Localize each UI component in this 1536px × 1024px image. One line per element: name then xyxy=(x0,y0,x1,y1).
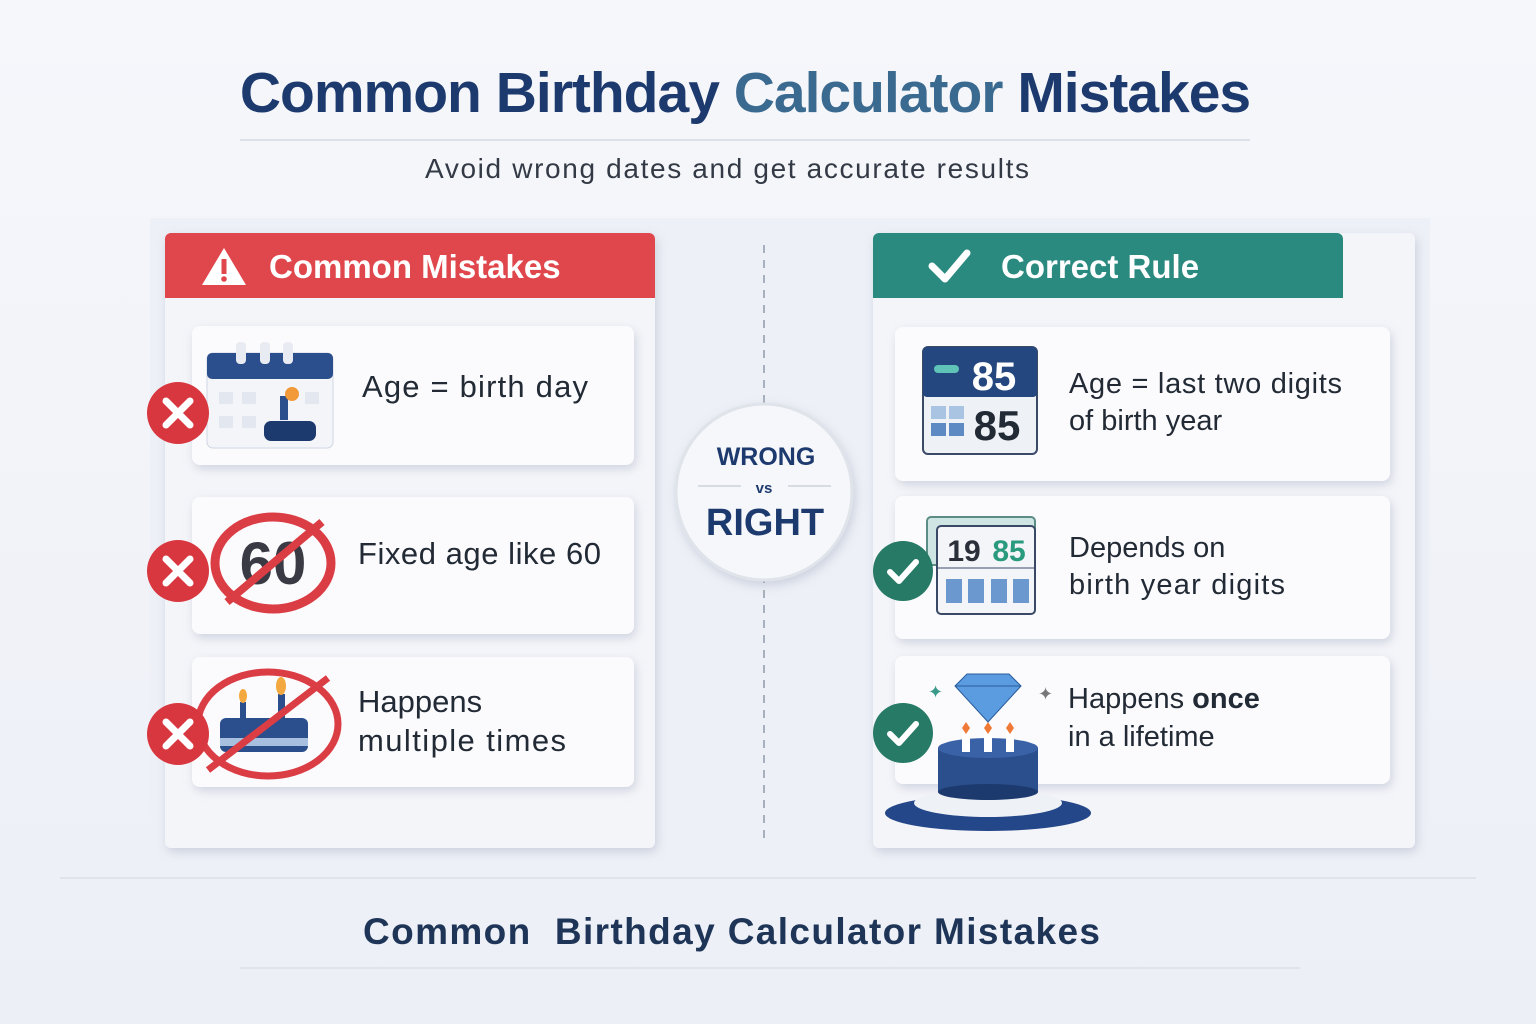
badge: wrong vs right: vs xyxy=(756,480,772,497)
icon: diamond cake: ✦ xyxy=(1038,684,1053,704)
title: Common Birthday Calculator Mistakes xyxy=(240,61,1250,125)
header: correct rule xyxy=(873,233,1343,298)
subtitle: Avoid wrong dates and get accurate results xyxy=(425,153,1029,184)
card: once in a lifetime: in a lifetime xyxy=(1068,721,1215,753)
icon: 1985 calendar: 85 xyxy=(992,535,1026,568)
header: common mistakes: Common Mistakes xyxy=(269,248,561,285)
icon: check xyxy=(932,253,967,279)
icon: 85 calendar: 85 xyxy=(974,402,1020,449)
badge: wrong vs right xyxy=(676,404,852,580)
card: fixed age xyxy=(147,497,634,634)
icon: red x xyxy=(147,703,209,765)
icon: warning xyxy=(202,248,246,285)
card: depends on digits: Depends on xyxy=(1069,532,1225,564)
icon: 1985 calendar: 19 xyxy=(947,535,981,568)
footer title: Common Birthday Calculator Mistakes xyxy=(363,911,1100,952)
header: correct rule: Correct Rule xyxy=(1001,248,1199,285)
card: fixed age: Fixed age like 60 xyxy=(358,536,601,571)
icon: diamond cake: ✦ xyxy=(928,682,943,702)
icon: diamond cake xyxy=(885,674,1091,831)
card: age = birth day: Age = birth day xyxy=(362,369,588,404)
badge: wrong vs right: RIGHT xyxy=(706,502,824,544)
card: last two digits: of birth year xyxy=(1069,405,1222,437)
panel: correct rule xyxy=(873,233,1415,848)
card: last two digits xyxy=(895,327,1390,481)
card: multiple times: multiple times xyxy=(358,723,566,758)
card: age = birth day xyxy=(147,326,634,465)
icon: 85 calendar xyxy=(923,347,1037,454)
card: depends on digits: birth year digits xyxy=(1069,569,1285,601)
icon: red x xyxy=(147,540,209,602)
card: once in a lifetime xyxy=(873,656,1390,831)
icon: 1985 calendar xyxy=(927,517,1035,614)
icon: no 60 xyxy=(215,517,331,609)
icon: green check xyxy=(873,541,933,601)
icon: green check xyxy=(873,703,933,763)
card: depends on digits xyxy=(873,496,1390,639)
icon: no 60: 60 xyxy=(240,530,306,597)
card: last two digits: Age = last two digits xyxy=(1069,368,1342,400)
icon: crossed cake xyxy=(198,672,338,776)
header: common mistakes xyxy=(165,233,655,298)
card: once in a lifetime: Happens once xyxy=(1068,683,1260,715)
panel: common mistakes xyxy=(147,233,655,848)
badge: wrong vs right: WRONG xyxy=(717,443,815,471)
icon: red x xyxy=(147,382,209,444)
icon: calendar xyxy=(207,342,333,448)
card: multiple times xyxy=(147,657,634,787)
icon: 85 calendar: 85 xyxy=(972,355,1016,399)
card: multiple times: Happens xyxy=(358,684,482,719)
